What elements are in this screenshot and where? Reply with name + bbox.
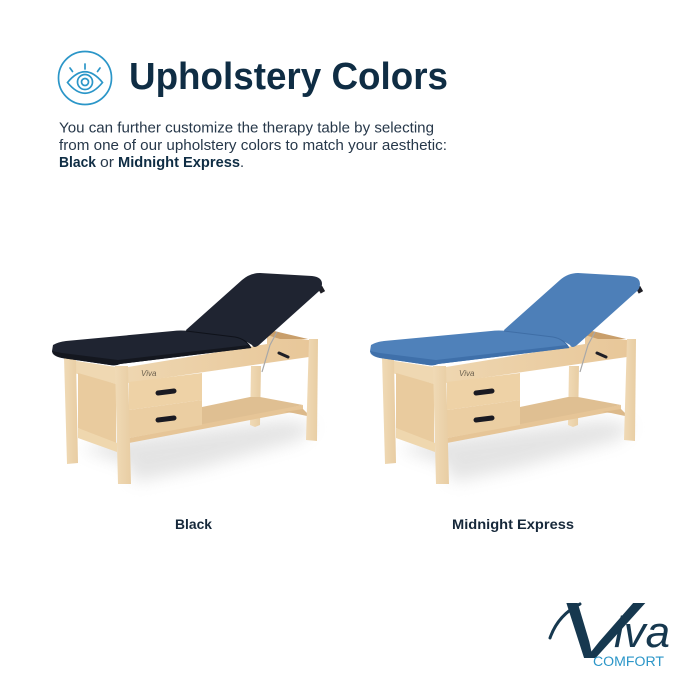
intro text block xyxy=(59,120,447,171)
product: table with black upholstery xyxy=(52,273,325,484)
label: Black: Black xyxy=(175,516,212,532)
label: Midnight Express: Midnight Express xyxy=(452,516,574,532)
title: Upholstery Colors xyxy=(129,56,448,98)
intro text block: Midnight Express xyxy=(118,155,240,171)
icon: eye in circle xyxy=(58,52,112,104)
logo: Viva Comfort xyxy=(550,586,670,675)
intro text block: Black xyxy=(59,155,97,171)
intro text block: You can further customize the therapy table by selecting xyxy=(59,120,434,136)
logo: Viva Comfort: iva xyxy=(614,608,670,657)
logo: Viva Comfort: COMFORT xyxy=(593,654,664,669)
logo: Viva Comfort: V xyxy=(556,586,646,675)
product: table with midnight express upholstery xyxy=(370,273,643,484)
intro text block: from one of our upholstery colors to match your aesthetic: xyxy=(59,138,447,154)
intro text block: . xyxy=(240,155,244,171)
intro text block: or xyxy=(100,155,114,171)
